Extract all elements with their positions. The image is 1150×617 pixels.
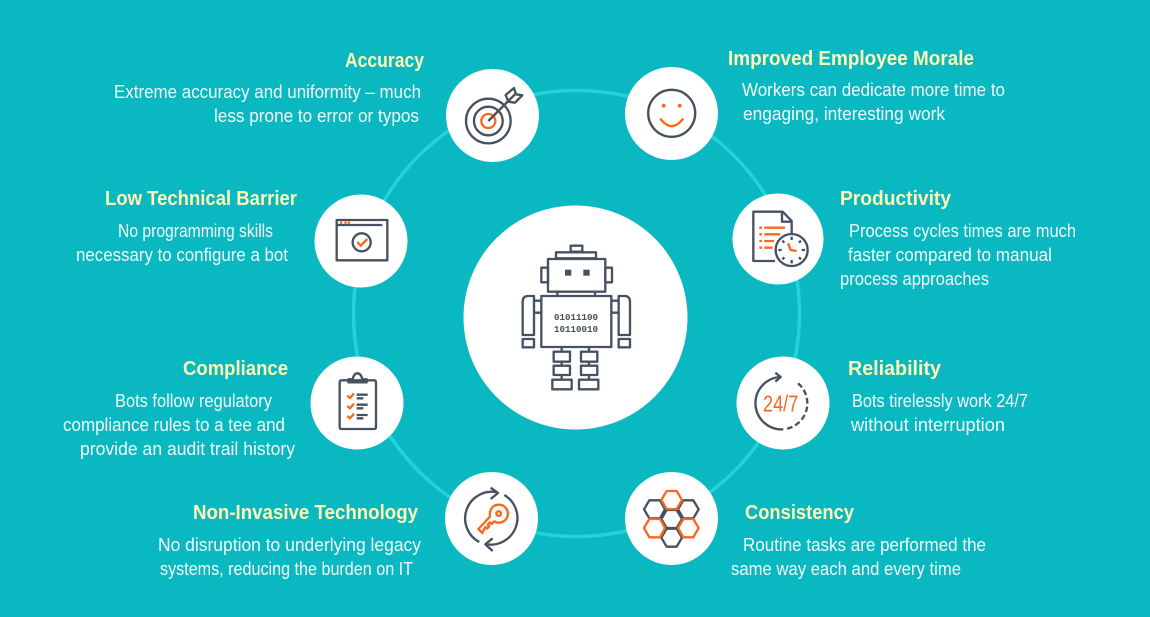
- central robot hub: [464, 206, 688, 430]
- panel: low technical barrier: [76, 188, 408, 288]
- icon: 24/7 cycle: 24/7: [763, 391, 798, 417]
- robot binary code: 01011100: [554, 312, 598, 323]
- text block: [742, 80, 1005, 124]
- text block: Routine tasks are performed the: [743, 535, 986, 555]
- text block: engaging, interesting work: [743, 104, 946, 124]
- heading: Accuracy: [345, 50, 425, 72]
- text block: same way each and every time: [731, 559, 961, 579]
- icon: browser window check: [314, 194, 408, 288]
- text block: Bots tirelessly work 24/7: [852, 391, 1028, 411]
- text block: [114, 82, 421, 126]
- text block: [731, 535, 986, 579]
- text block: [158, 535, 421, 579]
- text block: No programming skills: [118, 221, 273, 241]
- text block: provide an audit trail history: [80, 439, 295, 459]
- heading: Reliability: [848, 358, 942, 380]
- panel: productivity: [732, 188, 1076, 289]
- text block: No disruption to underlying legacy: [158, 535, 421, 555]
- text block: process approaches: [840, 269, 989, 289]
- panel: accuracy: [114, 50, 539, 162]
- heading: Productivity: [840, 188, 952, 210]
- panel: compliance: [63, 356, 404, 459]
- robot binary code: 10110010: [554, 324, 598, 335]
- text block: Workers can dedicate more time to: [742, 80, 1005, 100]
- text block: necessary to configure a bot: [76, 245, 288, 265]
- text block: without interruption: [850, 415, 1005, 435]
- icon: smiley: [625, 67, 718, 160]
- icon: honeycomb: [625, 472, 718, 565]
- heading: Consistency: [745, 502, 855, 524]
- heading: Improved Employee Morale: [728, 48, 974, 70]
- text block: less prone to error or typos: [214, 106, 419, 126]
- text block: systems, reducing the burden on IT: [160, 559, 413, 579]
- panel: consistency: [625, 472, 986, 579]
- icon: clipboard checklist: [310, 356, 404, 450]
- heading: Low Technical Barrier: [105, 188, 297, 210]
- icon: robot: [523, 246, 630, 389]
- text block: [840, 221, 1076, 289]
- icon: document and clock: [732, 194, 824, 284]
- text block: Process cycles times are much: [849, 221, 1076, 241]
- text block: [63, 391, 295, 459]
- heading: Non-Invasive Technology: [193, 502, 419, 524]
- text block: faster compared to manual: [848, 245, 1052, 265]
- text block: Bots follow regulatory: [115, 391, 272, 411]
- text block: compliance rules to a tee and: [63, 415, 285, 435]
- panel: improved employee morale: [625, 48, 1005, 160]
- heading: Compliance: [183, 358, 288, 380]
- text block: [76, 221, 288, 265]
- icon: key with cycle arrows: [445, 472, 538, 565]
- icon: 24/7 cycle: [736, 356, 830, 450]
- icon: target: [446, 69, 539, 162]
- panel: non-invasive technology: [158, 472, 538, 579]
- text block: [850, 391, 1028, 435]
- robot binary code: [554, 312, 598, 335]
- text block: Extreme accuracy and uniformity – much: [114, 82, 421, 102]
- panel: reliability: [736, 356, 1028, 450]
